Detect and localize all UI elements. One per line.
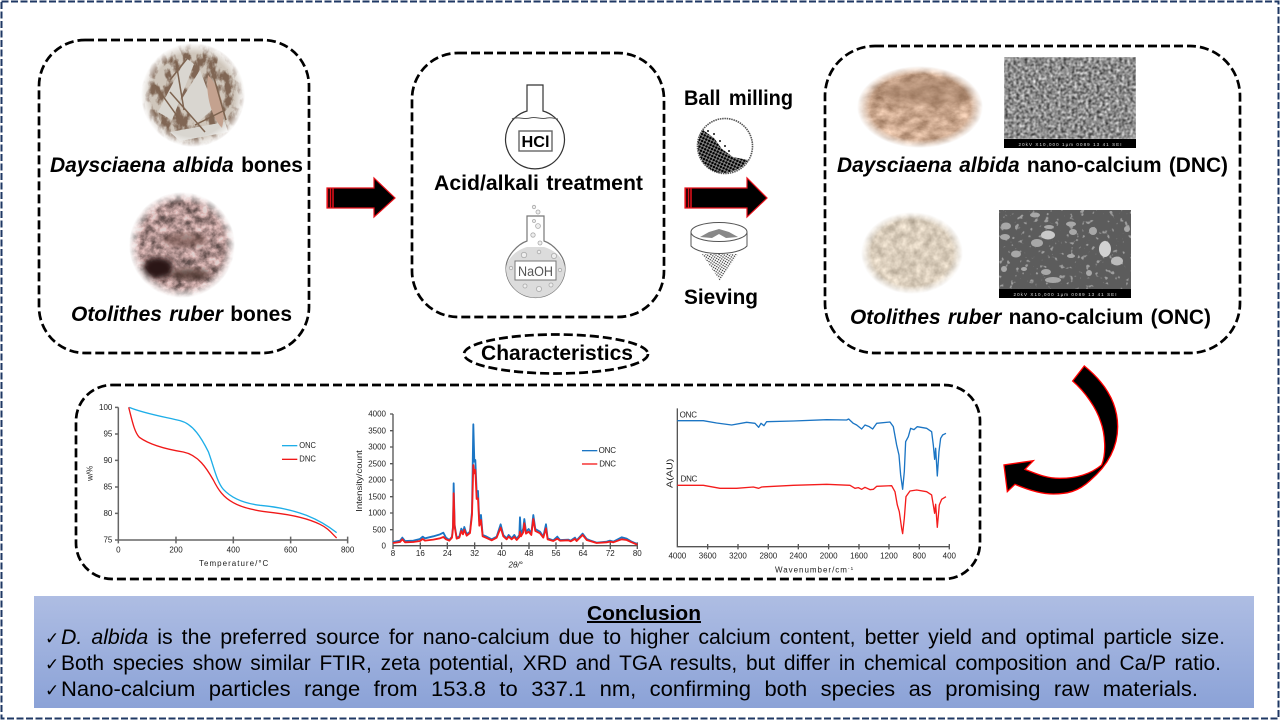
chart: FTIR spectra: 400 — [943, 552, 957, 561]
chart: FTIR spectra: 800 — [913, 552, 927, 561]
chart: TGA curves: 0 — [116, 546, 121, 555]
panel: acid and alkali treatment — [412, 53, 664, 317]
chart: XRD patterns: 4000 — [368, 410, 387, 419]
chart: XRD patterns: DNC — [599, 459, 616, 468]
chart: FTIR spectra: -1 — [848, 566, 854, 572]
chart: XRD patterns: 64 — [579, 549, 588, 558]
conclusion point 2: Both species show similar FTIR, zeta potential, XRD and TGA results, but differ in chemical composition and Ca/P ratio. — [61, 652, 1221, 675]
chart: XRD patterns: 3000 — [368, 443, 387, 452]
chart: XRD patterns: 80 — [633, 549, 642, 558]
chart: XRD patterns: 2500 — [368, 459, 387, 468]
chart: FTIR spectra — [665, 408, 957, 575]
photo: DNC powder — [858, 66, 982, 148]
panel: conclusion — [34, 596, 1254, 708]
chart: XRD patterns: 24 — [443, 549, 452, 558]
chart: FTIR spectra: 1200 — [880, 552, 898, 561]
label: Ball milling: Ball milling — [684, 87, 793, 110]
chart: XRD patterns: 1000 — [368, 509, 387, 518]
label: Otolithes ruber bones: Otolithes ruber bones — [71, 303, 292, 326]
panel: characterisation charts — [76, 385, 980, 579]
chart: TGA curves: DNC — [299, 455, 316, 464]
chart: TGA curves: 95 — [103, 430, 113, 439]
icon: ball mill — [698, 118, 752, 174]
chart: FTIR spectra: 3600 — [699, 552, 717, 561]
chart: XRD patterns — [355, 410, 642, 569]
label: Characteristics — [464, 334, 648, 374]
chart: FTIR spectra: 2000 — [820, 552, 838, 561]
icon: HCl flask — [506, 85, 564, 169]
conclusion point 2: ✓ — [45, 655, 59, 675]
chart: XRD patterns: 8 — [391, 549, 396, 558]
chart: TGA curves: 600 — [284, 546, 298, 555]
chart: XRD patterns: 16 — [416, 549, 425, 558]
chart: FTIR spectra: 3200 — [729, 552, 747, 561]
image: DNC SEM micrograph — [1004, 57, 1136, 148]
chart: XRD patterns: 72 — [606, 549, 615, 558]
heading: Conclusion: Conclusion — [587, 603, 701, 625]
chart: FTIR spectra: DNC — [681, 475, 698, 484]
chart: TGA curves: 75 — [103, 536, 113, 545]
chart: FTIR spectra: ONC — [680, 411, 697, 420]
chart: TGA curves: 800 — [341, 546, 355, 555]
chart: XRD patterns: 2000 — [368, 476, 387, 485]
image: ONC SEM micrograph: 20kV X10,000 1μm 0089 13 41 SEI — [1014, 292, 1116, 297]
icon: NaOH flask: NaOH — [518, 263, 553, 279]
chart: XRD patterns: Intensity/count — [355, 449, 364, 512]
arrow: treatment to nano-calcium — [685, 178, 767, 217]
conclusion point 3: Nano-calcium particles range from 153.8 to 337.1 nm, confirming both species as promising raw materials. — [61, 678, 1198, 701]
label: Sieving: Sieving — [684, 286, 758, 309]
icon: sieve — [691, 222, 747, 281]
photo: ONC powder — [862, 213, 962, 293]
label: Characteristics: Characteristics — [481, 342, 633, 365]
chart: XRD patterns: 40 — [497, 549, 507, 558]
chart: TGA curves: w/% — [86, 466, 95, 482]
chart: XRD patterns: 1500 — [368, 492, 387, 501]
image: DNC SEM micrograph: 20kV X10,000 1μm 0089 13 41 SEI — [1018, 142, 1122, 147]
chart: TGA curves: Temperature/°C — [199, 559, 269, 568]
chart: XRD patterns: 32 — [470, 549, 480, 558]
chart: XRD patterns: 3500 — [368, 426, 387, 435]
panel: raw fish bones — [39, 40, 309, 353]
chart: XRD patterns: 48 — [525, 549, 534, 558]
conclusion point 3: ✓ — [45, 681, 59, 701]
chart: XRD patterns: 2θ/° — [508, 560, 523, 569]
chart: TGA curves: 400 — [227, 546, 241, 555]
chart: FTIR spectra: Wavenumber/cm — [775, 566, 847, 575]
icon: HCl flask: HCl — [522, 134, 550, 151]
chart: TGA curves: 90 — [103, 456, 113, 465]
chart: FTIR spectra: 2400 — [789, 552, 808, 561]
label: DNC: Daysciaena albida nano-calcium (DNC) — [837, 154, 1228, 177]
conclusion point 1: ✓ — [45, 629, 59, 649]
chart: FTIR spectra: 4000 — [668, 552, 687, 561]
chart: TGA curves: 100 — [99, 403, 113, 412]
label: Daysciaena albida bones: Daysciaena albida bones — [50, 154, 303, 177]
chart: FTIR spectra: 2800 — [759, 552, 778, 561]
photo: Daysciaena albida bones — [142, 44, 244, 146]
chart: FTIR spectra: 1600 — [850, 552, 868, 561]
label: ONC: Otolithes ruber nano-calcium (ONC) — [850, 306, 1211, 329]
arrow: bones to treatment — [327, 178, 395, 217]
chart: TGA curves — [86, 403, 355, 568]
image: ONC SEM micrograph — [999, 210, 1131, 298]
chart: FTIR spectra: A(AU) — [665, 458, 674, 488]
label: Acid/alkali treatment: Acid/alkali treatment — [434, 172, 643, 195]
chart: XRD patterns: 0 — [382, 541, 387, 550]
chart: TGA curves: 80 — [103, 509, 113, 518]
chart: TGA curves: ONC — [299, 441, 316, 450]
panel: nano-calcium products — [825, 46, 1240, 353]
chart: XRD patterns: ONC — [599, 446, 616, 455]
chart: TGA curves: 85 — [103, 483, 113, 492]
chart: XRD patterns: 56 — [552, 549, 561, 558]
photo: Otolithes ruber bones — [128, 192, 238, 298]
icon: NaOH flask — [506, 205, 565, 298]
conclusion point 1: D. albida is the preferred source for nano-calcium due to higher calcium content, better yield and optimal particle size. — [61, 626, 1225, 649]
chart: TGA curves: 200 — [169, 546, 183, 555]
arrow: curved arrow to characteristics — [1004, 366, 1118, 494]
chart: XRD patterns: 500 — [373, 525, 387, 534]
